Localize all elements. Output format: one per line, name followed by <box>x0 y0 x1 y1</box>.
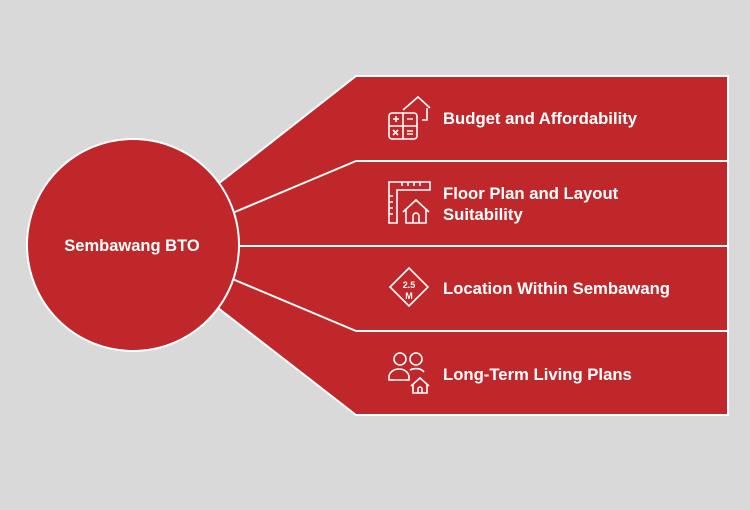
fan panel <box>218 76 728 415</box>
text: Suitability <box>443 205 523 224</box>
text: long-term: Long-Term Living Plans <box>443 365 632 384</box>
text: budget: Budget and Affordability <box>443 109 638 128</box>
icon: people house <box>389 353 429 393</box>
icon: calculator house <box>389 97 430 139</box>
text: floor plan: Floor Plan and Layout <box>443 184 619 203</box>
icon: distance sign <box>390 268 428 306</box>
central circle: Sembawang BTO <box>64 237 200 255</box>
central circle <box>27 139 239 351</box>
icon: distance sign: 2.5 <box>403 280 415 290</box>
icon: floor plan <box>389 182 430 223</box>
text: location: Location Within Sembawang <box>443 279 670 298</box>
icon: distance sign: M <box>405 291 413 301</box>
